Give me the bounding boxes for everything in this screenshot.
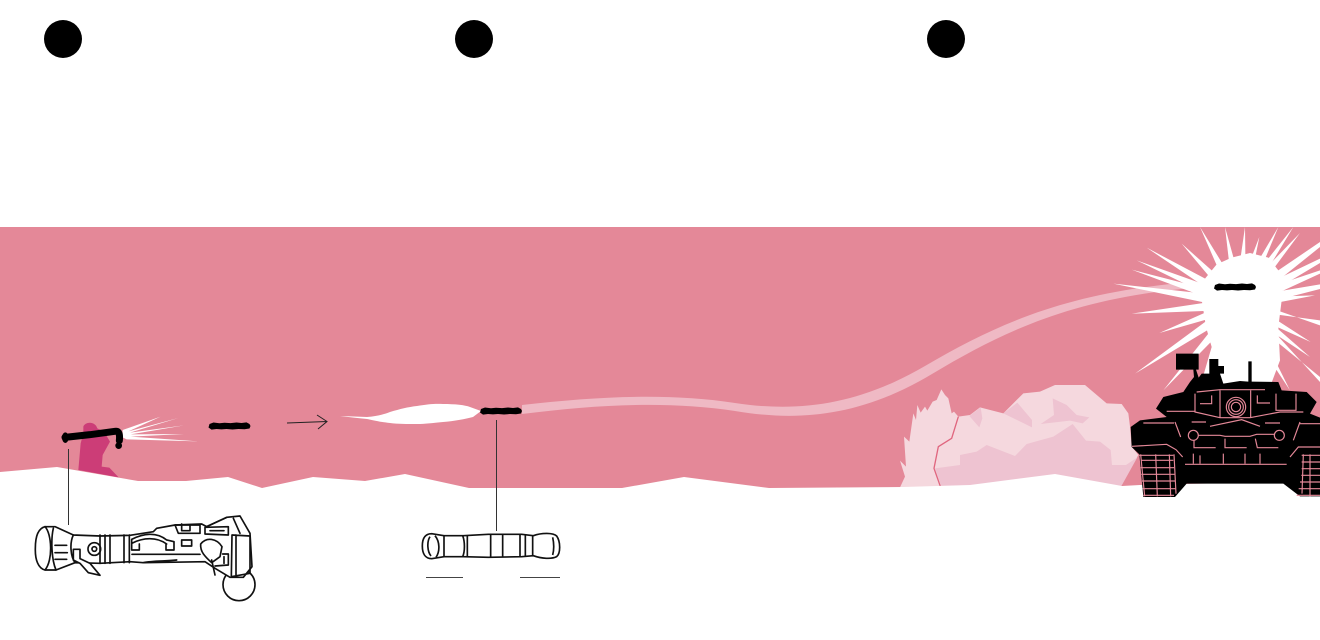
missile in sustained flight — [480, 407, 522, 415]
leader line missile — [496, 420, 498, 531]
explosion — [1113, 227, 1320, 390]
step marker 2 — [455, 20, 493, 58]
step marker 3 — [927, 20, 965, 58]
tank detail lines — [1132, 390, 1320, 496]
dimension rule right — [520, 576, 560, 578]
missile trail — [522, 282, 1192, 416]
missile in first flight — [208, 422, 250, 430]
soldier — [78, 423, 119, 477]
step marker 1 — [44, 20, 82, 58]
rocks and bush — [900, 385, 1138, 487]
ground — [0, 467, 1320, 640]
tank silhouette — [1131, 354, 1320, 497]
dimension rule left — [426, 576, 463, 578]
leader line launcher — [68, 449, 70, 525]
tank — [1131, 354, 1320, 497]
launcher held by soldier — [62, 431, 122, 449]
launcher outline — [35, 516, 252, 577]
launcher backblast — [123, 417, 198, 441]
grip circle — [223, 569, 255, 601]
sky band — [0, 227, 1320, 497]
missile at impact — [1214, 283, 1256, 291]
missile diagram — [422, 533, 560, 559]
direction arrow — [287, 415, 327, 429]
rocket flame — [340, 404, 481, 424]
launcher diagram — [35, 516, 255, 601]
